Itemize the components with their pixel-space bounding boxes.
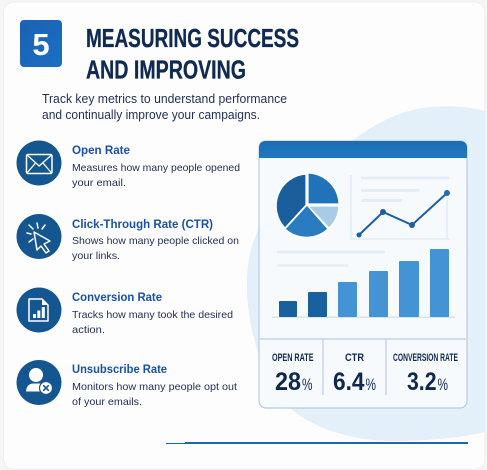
stat: open rate: OPEN RATE: [272, 352, 314, 364]
stat: open rate: [272, 352, 314, 396]
stat: conversion rate: 3.2: [407, 368, 436, 396]
decorative pale blue blob: [247, 106, 485, 441]
conversion rate description: action.: [72, 324, 105, 336]
dashboard header bar: [259, 141, 467, 158]
stat: ctr: [333, 352, 376, 396]
stat: ctr: 6.4: [333, 368, 365, 396]
panel: dashboard: [259, 141, 467, 408]
conversion rate description: [72, 309, 233, 336]
unsubscribe rate heading: Unsubscribe Rate: [72, 362, 167, 376]
section number badge: 5: [32, 27, 50, 62]
icon: document with bar chart: [16, 288, 62, 332]
metric: click-through rate: [16, 214, 239, 262]
click-through rate description: Shows how many people clicked on: [72, 235, 239, 247]
conversion rate description: Tracks how many took the desired: [72, 309, 233, 321]
unsubscribe rate description: Monitors how many people opt out: [72, 381, 237, 393]
click-through rate description: your links.: [72, 250, 120, 262]
title: [86, 23, 299, 84]
open rate description: [72, 162, 240, 189]
stat: open rate: %: [302, 375, 312, 394]
footer rule: [166, 442, 468, 444]
icon: cursor click: [16, 214, 62, 259]
icon: envelope: [16, 140, 62, 186]
conversion rate heading: Conversion Rate: [72, 290, 162, 304]
title: MEASURING SUCCESS: [86, 23, 299, 53]
metric: unsubscribe rate: [16, 360, 237, 408]
intro text: [42, 92, 287, 122]
line chart: [351, 175, 450, 239]
title: AND IMPROVING: [86, 54, 246, 84]
open rate description: your email.: [72, 177, 126, 189]
stat: conversion rate: [393, 352, 458, 396]
open rate heading: Open Rate: [72, 143, 130, 157]
stat dividers: [260, 339, 466, 395]
click-through rate description: [72, 235, 239, 262]
stat: ctr: CTR: [345, 352, 364, 364]
intro text: Track key metrics to understand performance: [42, 92, 287, 106]
intro text: and continually improve your campaigns.: [42, 108, 260, 122]
section number badge: [20, 20, 62, 67]
icon: user with x: [16, 360, 62, 405]
stat: open rate: 28: [275, 368, 301, 396]
unsubscribe rate description: [72, 381, 237, 408]
stat: ctr: %: [366, 375, 376, 394]
click-through rate heading: Click-Through Rate (CTR): [72, 217, 213, 231]
bar chart: [272, 249, 455, 318]
open rate description: Measures how many people opened: [72, 162, 240, 174]
unsubscribe rate description: of your emails.: [72, 396, 142, 408]
stat: conversion rate: %: [438, 375, 448, 394]
metric: open rate: [16, 140, 240, 189]
pie chart: [276, 173, 339, 237]
metric: conversion rate: [16, 288, 233, 336]
